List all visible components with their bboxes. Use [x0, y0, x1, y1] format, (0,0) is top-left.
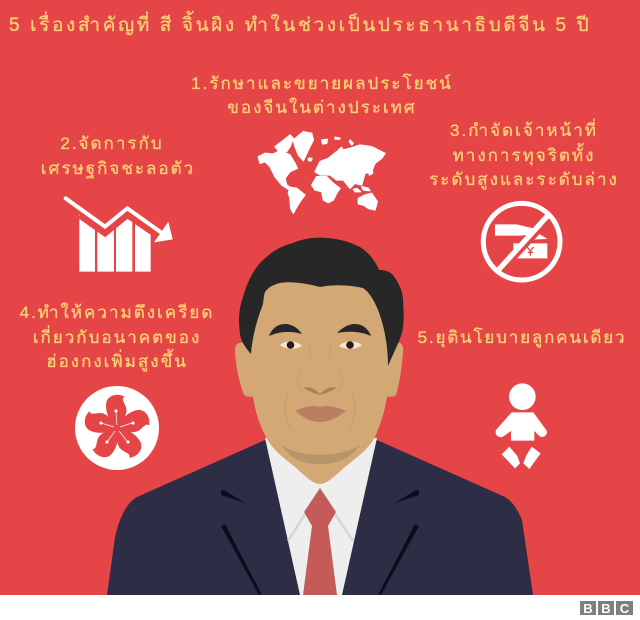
- face: [250, 278, 390, 484]
- item 4 text: [20, 302, 214, 372]
- item 1 text: ของจีนในต่างประเทศ: [227, 98, 417, 116]
- item 2 text: 2.จัดการกับ: [60, 134, 164, 153]
- item 5 text: 5.ยุตินโยบายลูกคนเดียว: [418, 328, 626, 347]
- lapel seams: [221, 524, 419, 595]
- item 3 text: ระดับสูงและระดับล่าง: [429, 170, 619, 189]
- item 2 text: [41, 134, 195, 179]
- icon: falling chart: [66, 198, 173, 272]
- icon: no bribery: [483, 203, 560, 280]
- shirt collar: [265, 438, 377, 595]
- item 4 text: เกี่ยวกับอนาคตของ: [33, 328, 201, 346]
- nose: [297, 345, 343, 391]
- BBC logo: B: [601, 601, 611, 616]
- eyes: [280, 341, 302, 349]
- eyebrows: [269, 324, 302, 336]
- BBC logo: C: [620, 601, 630, 616]
- title: 5 เรื่องสำคัญที่ สี จิ้นผิง ทำในช่วงเป็นประธานาธิบดีจีน 5 ปี: [9, 15, 591, 36]
- hair: [239, 238, 404, 366]
- icon: baby: [496, 383, 547, 469]
- item 3 text: ทางการทุจริตทั้ง: [453, 146, 595, 164]
- item 2 text: เศรษฐกิจชะลอตัว: [41, 158, 195, 178]
- icon: world map: [258, 132, 385, 213]
- lips: [295, 406, 346, 422]
- cheek lines: [285, 390, 355, 430]
- item 4 text: 4.ทำให้ความตึงเครียด: [20, 303, 214, 322]
- BBC logo: B: [583, 601, 593, 616]
- necktie: [303, 488, 337, 595]
- item 3 text: 3.กำจัดเจ้าหน้าที่: [450, 121, 598, 140]
- item 1 text: 1.รักษาและขยายผลประโยชน์: [191, 74, 453, 93]
- item 4 text: ฮ่องกงเพิ่มสูงขึ้น: [46, 352, 188, 371]
- portrait: [107, 238, 533, 595]
- BBC logo: [580, 601, 633, 616]
- item 1 text: [191, 73, 453, 116]
- item 3 text: [429, 118, 619, 190]
- ears: [235, 343, 256, 397]
- icon: Hong Kong bauhinia: [75, 386, 159, 470]
- suit jacket: [107, 440, 533, 595]
- neck shadow: [282, 445, 360, 464]
